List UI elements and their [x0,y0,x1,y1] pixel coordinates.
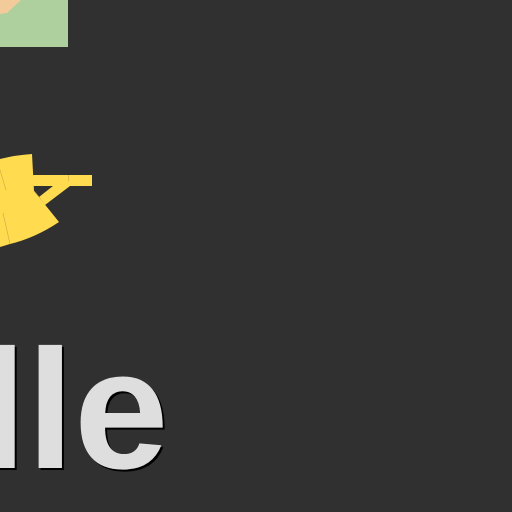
panel: green map tile [0,0,68,47]
peach shape [0,0,21,14]
icon: yellow fan shape [0,154,92,247]
